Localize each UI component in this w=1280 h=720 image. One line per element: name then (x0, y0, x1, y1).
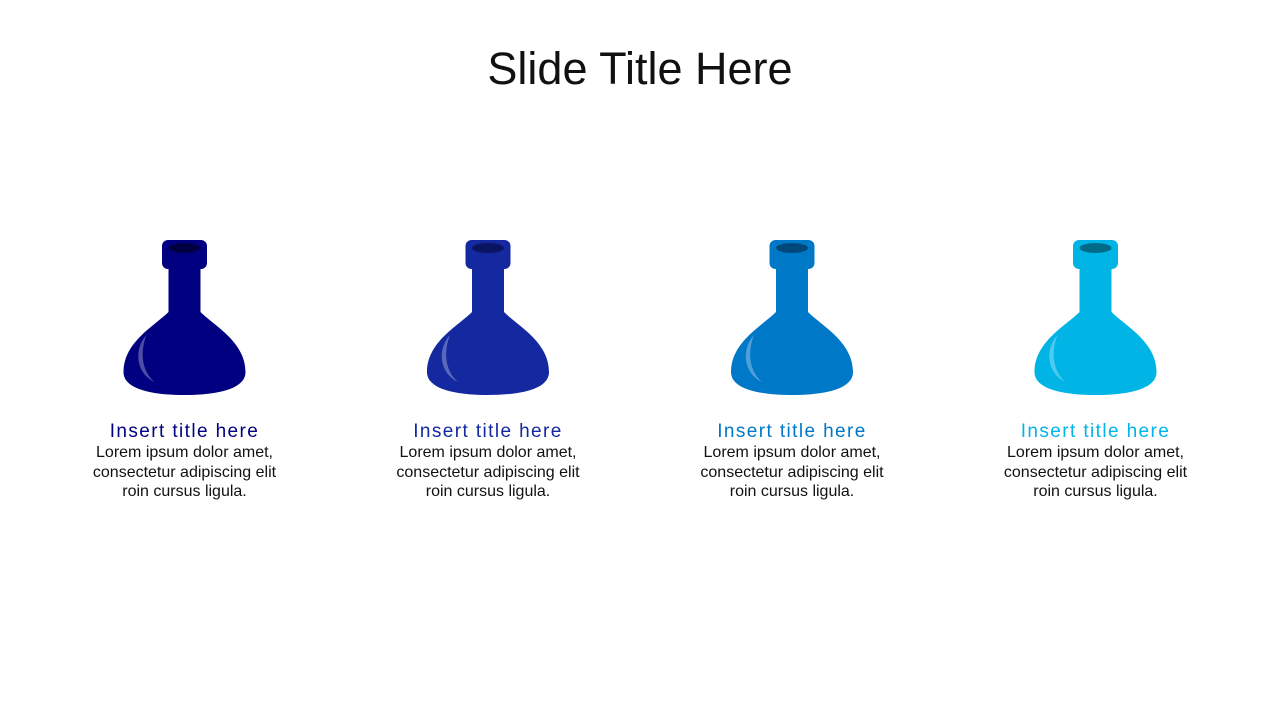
text block 3: consectetur adipiscing elit (700, 464, 884, 480)
text block 3: roin cursus ligula. (730, 483, 854, 500)
text block 3: Insert title here (717, 421, 867, 442)
icon: flask 1 (124, 240, 246, 395)
text block 3: Lorem ipsum dolor amet, (704, 444, 880, 461)
text block 2: Insert title here (413, 421, 563, 442)
text block 1: Insert title here (110, 421, 259, 442)
text block 2: roin cursus ligula. (426, 483, 550, 500)
icon: flask 3 (731, 240, 853, 395)
text block 2: consectetur adipiscing elit (396, 464, 580, 480)
text block 4: roin cursus ligula. (1033, 483, 1158, 500)
icon: flask 4 (1034, 240, 1156, 395)
text block 4: Insert title here (1021, 421, 1170, 442)
text block 2 (396, 421, 580, 500)
text block 4: consectetur adipiscing elit (1004, 464, 1187, 480)
text block 2: Lorem ipsum dolor amet, (400, 444, 576, 461)
text block 1: Lorem ipsum dolor amet, (96, 444, 273, 461)
text block 1: roin cursus ligula. (122, 483, 247, 500)
icon: flask 2 (427, 240, 549, 395)
text block 4 (1004, 421, 1187, 500)
text block 3 (700, 421, 884, 500)
title: Slide Title Here (487, 43, 793, 94)
text block 1 (93, 421, 276, 500)
text block 1: consectetur adipiscing elit (93, 464, 276, 480)
text block 4: Lorem ipsum dolor amet, (1007, 444, 1184, 461)
